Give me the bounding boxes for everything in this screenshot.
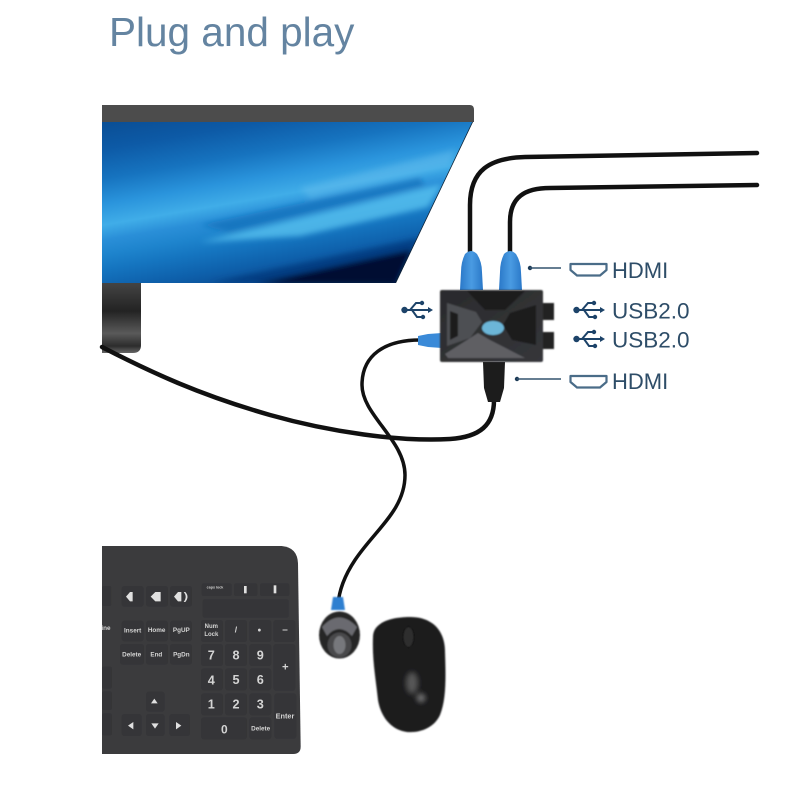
key labels: Delete xyxy=(122,652,142,659)
key labels: 8 xyxy=(232,648,240,662)
monitor bezel xyxy=(102,105,474,122)
key labels: 0 xyxy=(221,722,228,736)
mouse highlight xyxy=(406,672,425,702)
keyboard body xyxy=(102,546,301,754)
remote button xyxy=(319,597,360,658)
key labels: 4 xyxy=(208,674,215,688)
remote body xyxy=(319,612,360,658)
cable: remote button xyxy=(338,340,420,605)
hub button xyxy=(482,321,504,335)
label: HDMI input: HDMI xyxy=(612,258,668,283)
key labels: • xyxy=(258,625,262,636)
key labels: Delete xyxy=(251,726,271,733)
mouse xyxy=(373,617,445,732)
icon: USB left xyxy=(401,301,433,319)
remote connector xyxy=(331,597,345,610)
label: HDMI input xyxy=(528,258,668,283)
key labels: PgDn xyxy=(173,652,190,659)
cable: monitor HDMI xyxy=(102,347,494,440)
key labels: 6 xyxy=(257,673,264,687)
hub body xyxy=(440,290,543,362)
key labels: 7 xyxy=(208,648,215,662)
key labels: PgUP xyxy=(173,627,190,634)
key labels: 9 xyxy=(257,648,264,662)
HDMI-connector: top left blue xyxy=(460,251,483,290)
key labels: Insert xyxy=(124,628,142,635)
key labels: End xyxy=(150,652,162,659)
key labels: Home xyxy=(148,627,166,634)
cable: top HDMI 2 xyxy=(510,185,757,252)
cables xyxy=(102,153,757,605)
cable: top HDMI 1 xyxy=(470,153,757,252)
right USB port top xyxy=(541,303,554,320)
key labels: – xyxy=(282,625,288,636)
monitor stand xyxy=(102,283,141,353)
monitor screen xyxy=(102,122,473,284)
key labels: / xyxy=(235,625,238,635)
key labels: ine xyxy=(101,625,111,632)
key labels: caps lock xyxy=(207,586,224,590)
label: USB2.0 bottom xyxy=(573,328,690,352)
right USB port bottom xyxy=(541,332,554,349)
HDMI-connector: top right blue xyxy=(499,251,522,290)
key labels: 1 xyxy=(208,698,215,712)
speaker and arrow key icons xyxy=(126,585,276,729)
monitor xyxy=(102,105,474,353)
label: HDMI output xyxy=(515,369,668,394)
label: USB2.0 top xyxy=(573,298,690,324)
label: HDMI output: HDMI xyxy=(612,369,668,394)
label: USB2.0 top: USB2.0 xyxy=(612,298,690,324)
key labels: 3 xyxy=(257,698,264,712)
key labels: 2 xyxy=(232,698,240,712)
key labels: Lock xyxy=(204,632,219,638)
key labels xyxy=(101,586,295,736)
label: USB2.0 bottom: USB2.0 xyxy=(612,328,690,352)
keyboard xyxy=(101,546,301,754)
HDMI-connector: bottom black xyxy=(483,362,505,402)
key labels: + xyxy=(282,662,289,674)
key labels: 5 xyxy=(232,673,240,687)
USB-connector: left blue xyxy=(418,333,442,348)
switch hub xyxy=(440,290,554,362)
title: Plug and play xyxy=(109,9,355,55)
key labels: Num xyxy=(205,624,218,630)
key labels: Enter xyxy=(276,712,295,721)
mouse wheel xyxy=(403,626,414,648)
